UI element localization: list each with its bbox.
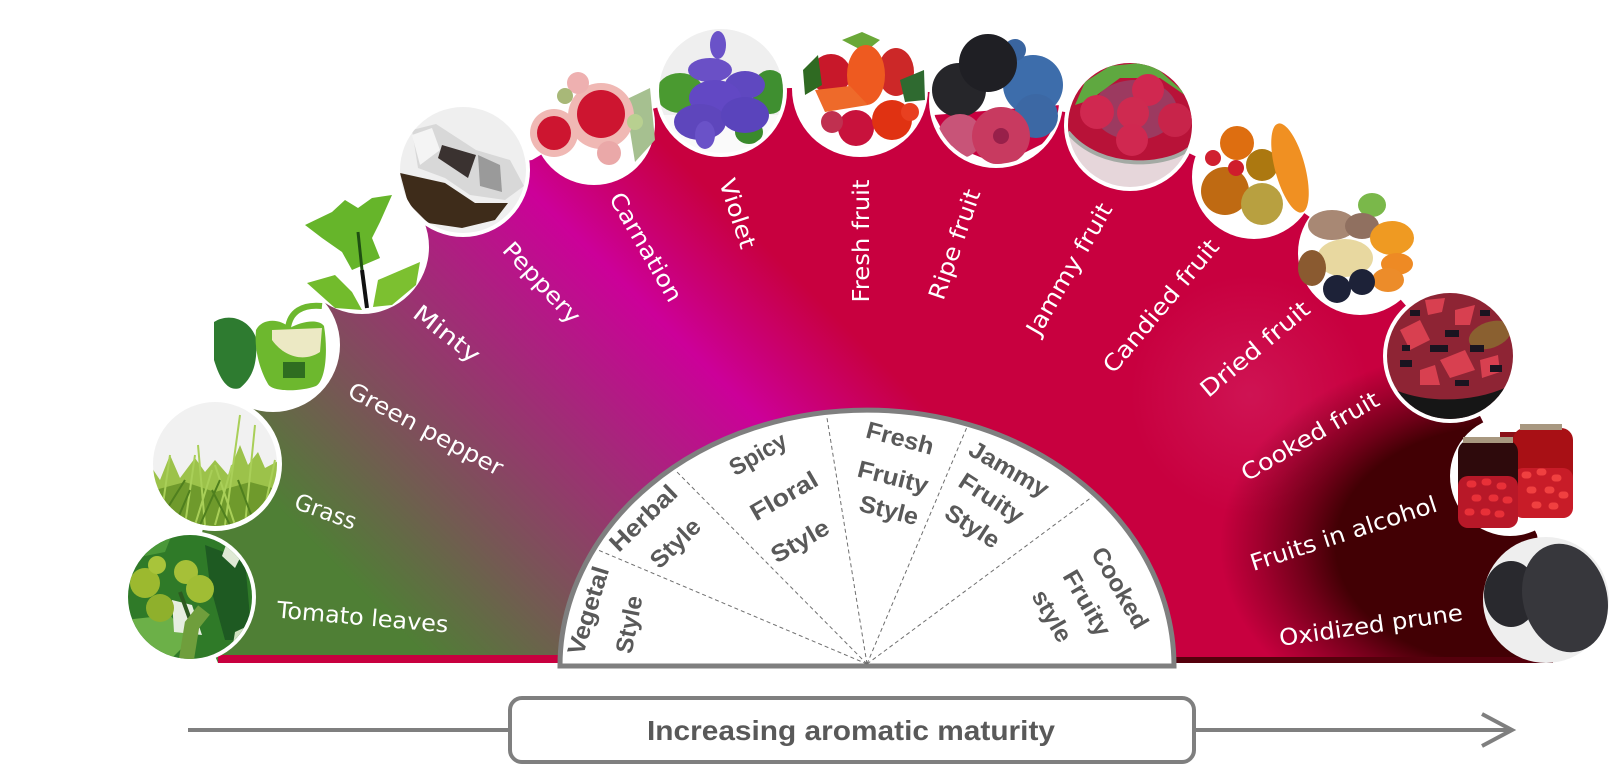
icon: cooked fruit photo (1383, 289, 1520, 425)
label: Jammy fruit: Jammy fruit (1021, 199, 1118, 342)
style: Cooked: Cooked (1085, 543, 1154, 634)
style: Floral Style word: Style (766, 514, 834, 569)
label: Dried fruit: Dried fruit (1195, 296, 1316, 403)
icon: ripe fruit photo (929, 34, 1063, 168)
style: Floral: Floral (745, 466, 823, 527)
icon: dried fruit photo (1298, 191, 1422, 315)
label: Fresh fruit: Fresh fruit (849, 179, 875, 303)
style: Fresh Style word: Style (856, 490, 921, 531)
label: Violet: Violet (713, 176, 760, 252)
gradient fan background (190, 88, 1580, 670)
caption box (510, 698, 1194, 762)
icon: green pepper photo (206, 278, 340, 412)
label: Tomato leaves: Tomato leaves (275, 597, 449, 638)
label: Peppery: Peppery (497, 237, 585, 329)
label: Minty: Minty (408, 300, 485, 369)
label: Candied fruit: Candied fruit (1098, 235, 1225, 378)
style: Fruity: Fruity (855, 456, 932, 500)
icon: tomato leaves photo (124, 531, 256, 663)
icon: candied fruit photo (1192, 115, 1316, 239)
style: Cooked style word: style (1026, 585, 1077, 647)
label: Grass: Grass (291, 489, 360, 536)
icon: grass photo (148, 397, 282, 531)
label: Fruits in alcohol: Fruits in alcohol (1247, 492, 1441, 577)
icon: jammy fruit photo (1064, 59, 1196, 191)
label: Carnation: Carnation (603, 188, 687, 307)
style: Jammy Fruity word: Fruity (954, 468, 1029, 530)
style: Spicy: Spicy (725, 427, 792, 482)
icon: oxidized prune photo (1483, 534, 1609, 663)
style: Fresh: Fresh (863, 417, 937, 461)
icon: pepper shaker photo (396, 103, 530, 237)
style: Vegetal: Vegetal (563, 563, 615, 658)
style: Vegetal Style word: Style (611, 594, 648, 656)
style: Herbal Style word: Style (645, 513, 707, 574)
label: Green pepper: Green pepper (343, 378, 508, 482)
caption box: Increasing aromatic maturity (647, 715, 1055, 746)
icon: violet photo (655, 25, 790, 160)
aroma labels (275, 176, 1464, 652)
style: Jammy Style word: Style (940, 499, 1005, 554)
icon: fresh fruit photo (792, 21, 928, 157)
icon: carnation photo (530, 63, 655, 185)
icon: mint leaves photo (295, 180, 429, 314)
label: Oxidized prune: Oxidized prune (1278, 600, 1464, 652)
style: Cooked Fruity word: Fruity (1057, 565, 1117, 642)
arrow: increasing maturity (188, 714, 1512, 746)
style: Herbal: Herbal (604, 480, 683, 557)
label: Ripe fruit: Ripe fruit (924, 186, 986, 303)
icon: fruits in alcohol jars photo (1450, 416, 1573, 536)
central semicircle of styles (560, 410, 1174, 666)
style: Jammy: Jammy (964, 436, 1054, 504)
label: Cooked fruit: Cooked fruit (1237, 387, 1384, 487)
